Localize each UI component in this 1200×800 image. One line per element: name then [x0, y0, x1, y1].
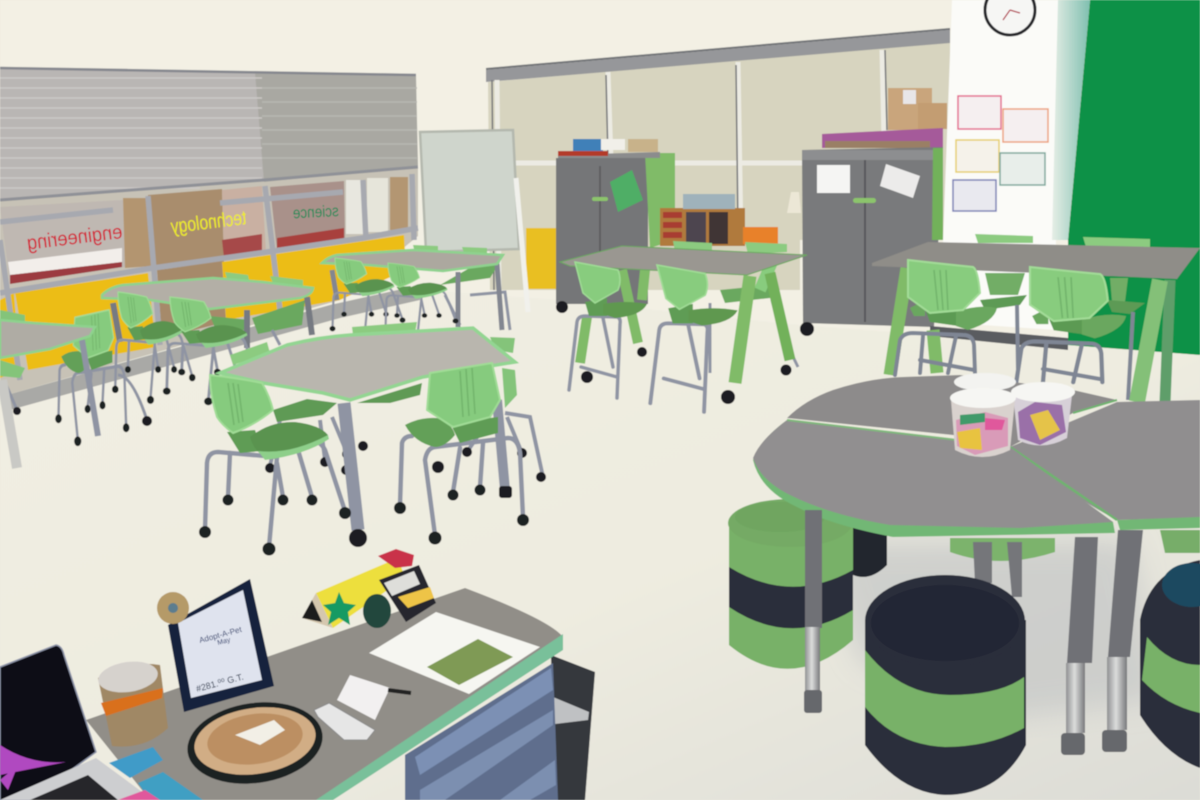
framed note: Adopt-A-Pet [198, 625, 243, 645]
left storage cabinet [556, 139, 675, 313]
table: centre with rolling chairs [199, 322, 546, 556]
cubby shelf [660, 192, 801, 246]
framed note: #281.⁰⁰ G.T. [195, 672, 245, 694]
window frame [0, 174, 418, 380]
mirrored word: technology: technology [169, 207, 248, 238]
clear buckets with blocks [950, 373, 1075, 457]
mirrored word: science: science [292, 203, 339, 222]
clipboard paper [369, 612, 540, 694]
floor shadow under tables [820, 540, 1160, 720]
dark baseboard [930, 326, 1068, 350]
yellow panels [15, 273, 156, 370]
calculator [314, 703, 375, 740]
table legs [804, 510, 1143, 755]
back wall [0, 0, 1200, 350]
right edge stool [1140, 560, 1200, 768]
pie [182, 694, 328, 792]
table: back-left round [322, 250, 503, 339]
pencil can [96, 658, 168, 747]
green stool [728, 499, 853, 669]
grey base band [7, 285, 420, 410]
pencil desk decoration [302, 549, 414, 628]
wall clock [985, 0, 1035, 35]
desk supplies [109, 747, 203, 800]
framed note [157, 579, 274, 712]
white wall column [940, 0, 1062, 330]
floor [0, 290, 1200, 800]
table: top right with stool chairs [872, 234, 1200, 403]
right storage cabinet [800, 147, 943, 336]
navy and green stool [865, 575, 1026, 795]
mirrored word: engineering: engineering [26, 221, 124, 255]
wall notices [953, 96, 1048, 211]
sticky note and pen [337, 675, 411, 720]
table: far-left [0, 320, 98, 468]
back window [486, 29, 950, 290]
small stools behind [853, 527, 1200, 577]
chairs behind left tables [0, 245, 510, 446]
whiteboard [420, 130, 528, 312]
tape dispenser [363, 594, 391, 628]
cardboard boxes [822, 88, 947, 148]
laptop [0, 645, 153, 800]
teal column edge [1052, 0, 1090, 240]
green wall [1068, 0, 1200, 355]
table: left round [102, 278, 313, 405]
instant camera [379, 565, 436, 622]
table: middle back with stool chairs [560, 241, 807, 412]
framed note: May [217, 637, 232, 647]
trash bin [551, 655, 595, 800]
left blinds [0, 68, 418, 200]
left window wall [0, 168, 420, 410]
teacher desk [86, 588, 563, 800]
round table group [753, 375, 1200, 537]
